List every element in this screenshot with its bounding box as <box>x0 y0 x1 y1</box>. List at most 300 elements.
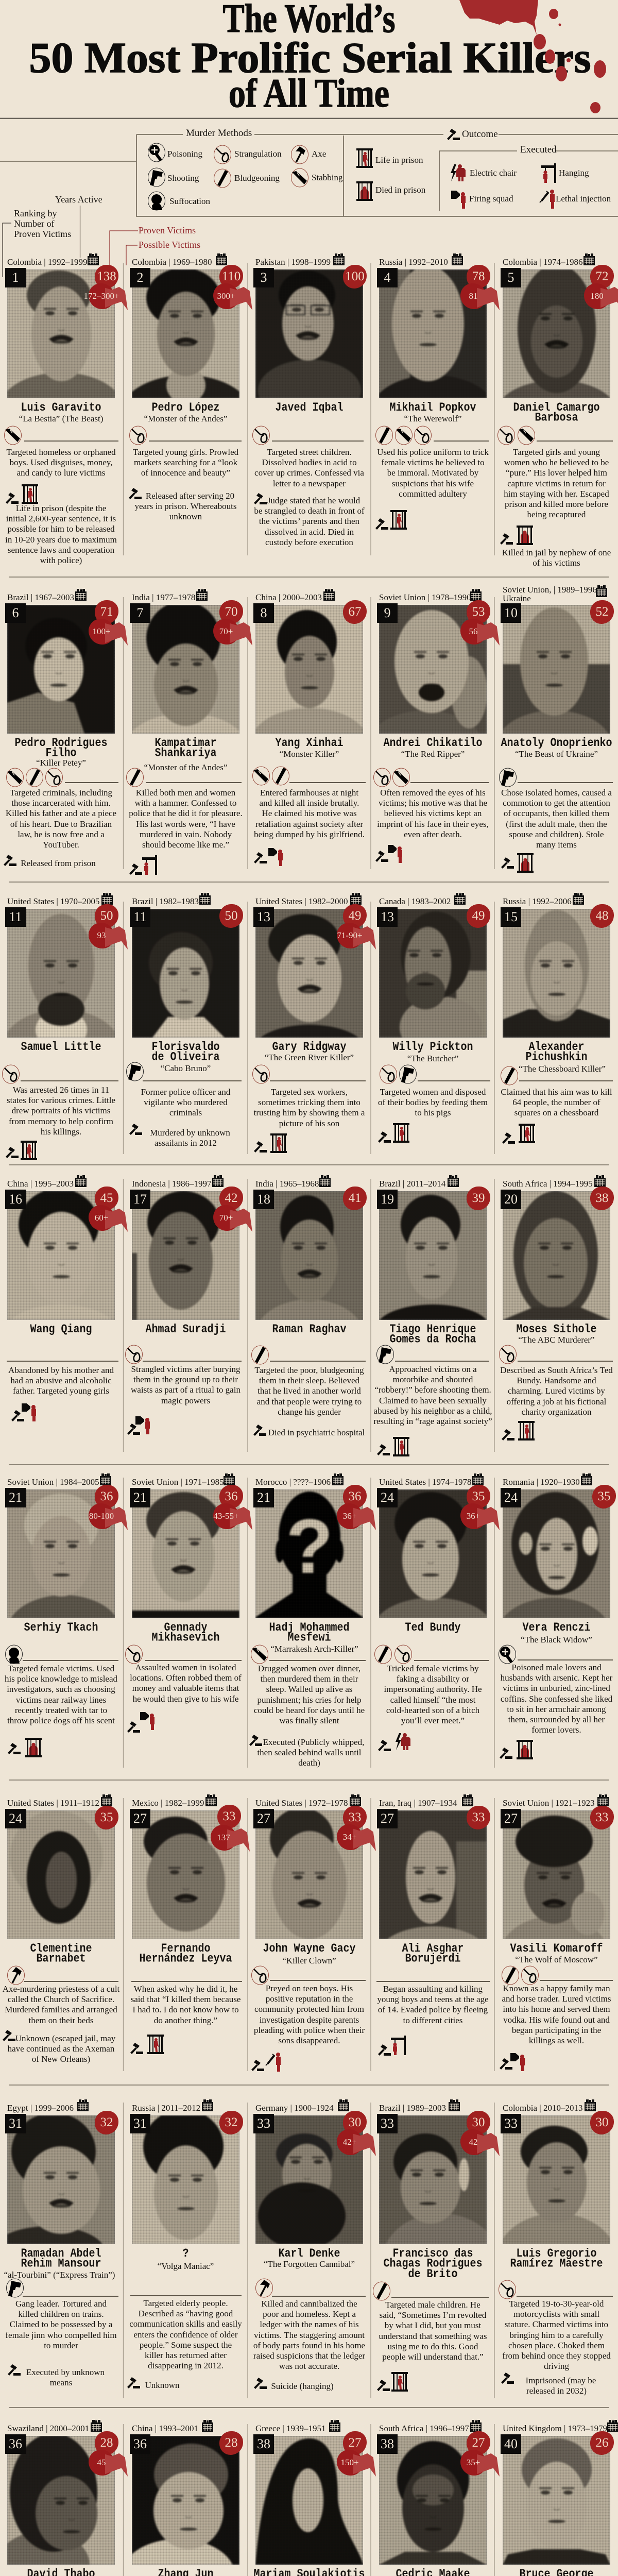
photo <box>255 2436 363 2565</box>
description <box>0 2299 123 2351</box>
outcome text: Imprisoned (may be <box>526 2376 596 2385</box>
description: former lovers. <box>531 1725 581 1735</box>
description: poor and homeless. Kept a <box>263 2309 356 2319</box>
proven victims <box>467 2431 490 2455</box>
description: of their bodies by feeding them <box>378 1097 488 1107</box>
nickname: “Monster of the Andes” <box>144 762 227 772</box>
description <box>371 1984 494 2026</box>
proven victims: 27 <box>348 2436 362 2450</box>
nickname: “The Beast of Ukraine” <box>515 749 598 759</box>
gavel <box>3 855 17 866</box>
card 26: Clementine Barnabet <box>7 1790 115 2076</box>
name: Vera Renczi <box>522 1621 591 1635</box>
outcome: life in prison <box>392 1123 410 1143</box>
rank <box>501 2114 521 2133</box>
outcome text <box>124 1128 247 1148</box>
outcome: firing squad <box>509 2052 527 2071</box>
description: Was arrested 26 times in 11 <box>13 1085 109 1095</box>
method: bludgeoning <box>501 1965 520 1985</box>
possible victims <box>89 283 114 309</box>
description <box>124 1984 247 2026</box>
description: female victims he believed to <box>381 457 485 467</box>
photo <box>7 1191 115 1320</box>
proven victims <box>467 1485 490 1509</box>
description: he would then give to his wife <box>133 1694 238 1704</box>
years active: Morocco | ????–1906 <box>255 1477 331 1487</box>
card 15: Alexander Pichushkin <box>503 888 610 1157</box>
possible victims <box>460 1503 486 1529</box>
name: Vasili Komaroff <box>510 1942 603 1956</box>
calendar icon <box>580 1473 593 1485</box>
calendar icon <box>205 1794 217 1806</box>
years active: Pakistan | 1998–1999 <box>255 257 331 267</box>
gavel <box>128 488 142 499</box>
years active: United States | 1974–1978 <box>379 1477 472 1487</box>
years active: Soviet Union, | 1989–1996 <box>503 585 597 595</box>
description: “robbery!” before shooting them. <box>374 1385 491 1395</box>
years active: United States | 1970–2005 <box>7 896 100 906</box>
method: strangulation <box>252 426 270 445</box>
description <box>124 788 247 850</box>
rank: 36 <box>9 2436 22 2451</box>
years active: Colombia | 2010–2013 <box>503 2103 582 2113</box>
description: killings as well. <box>529 2036 584 2045</box>
description: victims in unburied, zinc-lined <box>503 1683 610 1693</box>
rank: 1 <box>12 270 19 285</box>
method: strangulation <box>499 1345 517 1364</box>
years active: United States | 1982–2000 <box>255 896 348 906</box>
key label: ranking: Ranking by <box>14 208 57 218</box>
possible victims: 42+ <box>343 2137 356 2147</box>
name: Mikhail Popkov <box>389 401 476 415</box>
possible victims: 71-90+ <box>337 930 363 940</box>
outcome text: Executed by unknown <box>26 2367 105 2377</box>
name: Pedro López <box>151 401 220 415</box>
description: cold-hearted son of a bitch <box>386 1705 479 1715</box>
description <box>371 788 494 840</box>
years active: India | 1965–1968 <box>255 1179 319 1189</box>
icon: suffocation <box>148 192 165 210</box>
method: bludgeoning <box>372 2281 391 2301</box>
outcome: life in prison <box>20 1141 38 1160</box>
gavel <box>500 533 513 545</box>
method: bludgeoning <box>25 768 44 787</box>
rank <box>253 603 274 623</box>
rank: 24 <box>9 1811 22 1826</box>
years active: Soviet Union | 1971–1985 <box>132 1477 224 1487</box>
method: suffocation <box>5 1645 23 1664</box>
proven victims <box>590 2111 614 2134</box>
description: chosen place. Choked them <box>508 2341 605 2350</box>
outcome text: released in 2032) <box>526 2386 587 2396</box>
name <box>0 2249 123 2269</box>
description <box>247 788 371 840</box>
outcome text: in 10-20 years due to maximum <box>5 535 117 545</box>
outcome text: Suicide (hanging) <box>271 2381 334 2391</box>
card 13: Gary Ridgway <box>255 888 363 1157</box>
name: Ramadan Abdel <box>21 2247 101 2261</box>
calendar icon <box>87 253 99 265</box>
possible victims: 172–300+ <box>83 291 119 301</box>
outcome: life in prison <box>518 1421 535 1440</box>
description: from behind once they stopped <box>502 2351 611 2361</box>
proven victims <box>590 265 614 289</box>
description: to sit in her armchair among <box>507 1704 606 1714</box>
description: Targeted 19-to-30-year-old <box>509 2299 604 2309</box>
name <box>124 1042 248 1063</box>
gavel <box>377 1740 391 1751</box>
calendar icon <box>101 892 113 905</box>
rank: 27 <box>504 1811 518 1826</box>
card 7: Kampatimar Shankariya <box>132 584 239 876</box>
rank: 27 <box>133 1811 147 1826</box>
description: investigation despite parents <box>260 2015 359 2025</box>
title: 50 Most Prolific Serial Killers <box>29 34 591 82</box>
rank <box>501 268 521 287</box>
proven victims: 33 <box>348 1810 362 1824</box>
description: was finally silent <box>279 1716 339 1725</box>
description: imprint of his face in their eyes, <box>377 819 489 829</box>
description <box>371 1364 494 1427</box>
description: should become like me.” <box>142 840 229 850</box>
rank <box>501 1809 521 1828</box>
proven victims <box>217 1805 241 1828</box>
description <box>494 1087 618 1118</box>
proven victims: 35 <box>597 1489 611 1503</box>
description: locations. Often robbed them of <box>130 1673 242 1683</box>
description: Approached victims on a <box>389 1364 477 1374</box>
possible victims <box>584 283 610 309</box>
name: Kampatimar <box>154 737 217 750</box>
name: Mikhasevich <box>151 1632 220 1645</box>
years active: Romania | 1920–1930 <box>503 1477 580 1487</box>
rank: 8 <box>261 605 267 620</box>
description: using me to do this. Good <box>388 2342 478 2351</box>
name: Florisvaldo <box>151 1041 220 1054</box>
proven victims <box>590 1187 614 1210</box>
name: Hernández Leyva <box>139 1953 232 1966</box>
method: shooting <box>399 1064 417 1084</box>
card 17: Ahmad Suradji <box>132 1171 239 1458</box>
proven victims: 36 <box>348 1489 362 1503</box>
card 22: Gennady Mikhasevich <box>132 1469 239 1772</box>
description: Targeted criminals, including <box>10 788 112 798</box>
outcome text: Released after serving 20 <box>146 491 234 501</box>
photo <box>503 269 610 398</box>
proven victims <box>467 600 490 624</box>
outcome: firing squad <box>21 1402 38 1421</box>
photo <box>503 1489 610 1618</box>
label: strangulation: Strangulation <box>234 149 282 159</box>
description: Axe-murdering priestess of a cult <box>3 1984 119 1994</box>
icon: shooting <box>148 168 165 187</box>
description <box>494 2299 618 2371</box>
outcome text <box>247 1737 371 1769</box>
possible victims: 42 <box>469 2137 478 2147</box>
name: Ahmad Suradji <box>145 1323 226 1336</box>
rank <box>253 2434 274 2454</box>
method: axe <box>7 1965 25 1985</box>
years active: Russia | 1992–2006 <box>503 896 572 906</box>
years active: Ukraine <box>503 594 531 603</box>
method: stabbing <box>6 768 24 787</box>
rank <box>130 603 150 623</box>
description: by what I did, but you must <box>385 2320 481 2330</box>
nickname: “The Forgotten Cannibal” <box>264 2259 355 2269</box>
possible victims: 100+ <box>92 626 111 636</box>
calendar icon <box>350 892 362 905</box>
description: women who he believed to be <box>504 457 609 467</box>
description: (first the adult male, then the <box>506 819 607 829</box>
calendar icon <box>595 585 608 597</box>
description: boys. Used disguises, money, <box>9 457 113 467</box>
gavel <box>253 2378 267 2389</box>
proven victims: 32 <box>100 2115 113 2129</box>
calendar icon <box>196 588 208 601</box>
description: vigilante who murdered <box>144 1097 228 1107</box>
gavel <box>5 493 19 504</box>
proven victims: 32 <box>225 2115 238 2129</box>
description: people.” Some suspect the <box>140 2340 232 2350</box>
card 3: Javed Iqbal <box>255 249 363 562</box>
description: sleep. Walled up alive as <box>266 1684 352 1694</box>
rank <box>130 268 150 287</box>
proven victims <box>590 2431 614 2455</box>
proven victims <box>343 1806 367 1829</box>
photo <box>132 1191 239 1320</box>
proven victims: 41 <box>348 1191 362 1205</box>
proven victims: 67 <box>348 605 362 619</box>
description: them, surrounded by all her <box>508 1715 605 1724</box>
icon: strangulation <box>214 145 231 164</box>
description: charming. Lured victims by <box>508 1386 605 1396</box>
description: squares on a chessboard <box>514 1108 598 1117</box>
photo <box>7 605 115 734</box>
gavel <box>127 2377 141 2388</box>
calendar icon <box>199 892 211 905</box>
card 2: Pedro López <box>132 249 239 562</box>
description: then murdered them in their <box>261 1674 358 1684</box>
years active: Soviet Union | 1984–2005 <box>7 1477 99 1487</box>
icon: poisoning <box>148 143 165 162</box>
description: police that he did it for pleasure. <box>129 808 243 818</box>
description: female jinn who compelled him <box>5 2330 117 2340</box>
method: bludgeoning <box>251 1345 269 1365</box>
possible victims <box>89 923 114 948</box>
label: suffocation: Suffocation <box>169 196 210 206</box>
possible victims <box>460 2450 486 2476</box>
description: Targeted women and disposed <box>380 1087 486 1097</box>
description: him staying with her. Escaped <box>504 489 609 499</box>
label: bludgeoning: Bludgeoning <box>234 173 280 183</box>
description <box>124 447 247 479</box>
name: Alexander <box>528 1041 585 1054</box>
method: strangulation <box>125 1345 143 1364</box>
description: retaliation against society after <box>255 819 363 829</box>
description <box>0 788 123 850</box>
years active: Russia | 2011–2012 <box>132 2103 200 2113</box>
description: positive reputation in the <box>266 1994 353 2004</box>
nickname: “The Green River Killer” <box>265 1053 354 1062</box>
proven victims: 35 <box>100 1810 113 1824</box>
possible victims: 43-55+ <box>213 1511 239 1521</box>
nickname: “The Chessboard Killer” <box>519 1064 606 1074</box>
method: strangulation <box>252 1064 270 1084</box>
photo <box>255 2115 363 2244</box>
possible victims: 70+ <box>219 626 233 636</box>
possible victims: 80-100 <box>89 1511 114 1521</box>
method: strangulation <box>521 1965 539 1985</box>
description: capture victims in return for <box>507 479 606 488</box>
description: trusting him by showing them a <box>254 1108 365 1117</box>
photo <box>503 1191 610 1320</box>
years active: Greece | 1939–1951 <box>255 2424 326 2433</box>
description: enters the confidence of older <box>133 2330 238 2340</box>
proven victims <box>95 265 118 289</box>
outcome text <box>494 548 618 568</box>
method: strangulation <box>129 426 147 445</box>
proven victims: 33 <box>472 1810 485 1824</box>
description: called the Church of Sacrifice. <box>8 1994 114 2004</box>
years active: Brazil | 1989–2003 <box>379 2103 446 2113</box>
description: investigators, such as choosing <box>7 1684 115 1694</box>
description: Entered farmhouses at night <box>260 788 358 798</box>
description: from memory to help confirm <box>9 1116 113 1126</box>
label: poisoning: Poisoning <box>167 149 202 159</box>
method: shooting <box>376 1345 394 1364</box>
rank <box>5 1190 26 1209</box>
description: faking a disability or <box>397 1674 469 1684</box>
description: abused by his neighbor as a child, <box>374 1406 492 1416</box>
gavel <box>376 2380 390 2391</box>
proven victims <box>467 1187 490 1210</box>
description: spouse and children). Stole <box>509 829 604 839</box>
description: Murdered families and arranged <box>5 2005 117 2014</box>
description <box>247 2299 371 2371</box>
calendar icon <box>451 253 464 265</box>
name: de Oliveira <box>151 1051 220 1064</box>
name: Borujerdi <box>405 1953 461 1966</box>
key label: possible victims: Possible Victims <box>139 240 200 250</box>
name: Samuel Little <box>21 1041 101 1054</box>
proven victims: 26 <box>595 2436 609 2450</box>
rank <box>253 268 274 287</box>
name: Luis Gregorio <box>516 2247 597 2261</box>
proven victims: 138 <box>97 269 116 283</box>
possible victims <box>460 283 486 309</box>
card 9: Andrei Chikatilo <box>379 584 487 876</box>
description: being dumped by his girlfriend. <box>254 829 365 839</box>
years active: Colombia | 1969–1980 <box>132 257 212 267</box>
name <box>247 1623 371 1643</box>
method: strangulation <box>497 426 516 445</box>
description <box>0 1664 123 1726</box>
description: magic powers <box>161 1396 210 1405</box>
description: waists as part of a ritual to gain <box>131 1385 241 1395</box>
description: said, “Sometimes I’m revolted <box>380 2310 486 2320</box>
photo <box>132 605 239 734</box>
name: Filho <box>45 747 76 760</box>
outcome text: years in prison. Whereabouts <box>135 501 236 511</box>
rank: 16 <box>9 1192 22 1207</box>
possible victims <box>213 1503 239 1529</box>
rank <box>130 1809 150 1828</box>
description: commotion to get the attention <box>503 798 610 808</box>
title <box>29 0 591 115</box>
gavel <box>253 1141 267 1153</box>
calendar icon <box>99 1473 112 1485</box>
name <box>124 738 248 759</box>
gavel <box>376 1444 390 1455</box>
description: offering a job at his fictional <box>507 1397 606 1406</box>
rank: 9 <box>384 605 390 620</box>
photo <box>132 909 239 1038</box>
nickname: “Monster Killer” <box>280 749 339 759</box>
description: driving <box>544 2361 569 2371</box>
years active: United States | 1911–1912 <box>7 1798 99 1808</box>
nickname: “al-Tourbini” (“Express Train”) <box>4 2270 115 2280</box>
method: bludgeoning <box>375 426 393 445</box>
calendar icon <box>454 892 466 905</box>
proven victims <box>219 1485 243 1509</box>
possible victims: 35+ <box>467 2458 480 2467</box>
method: bludgeoning <box>374 1645 392 1664</box>
description: Strangled victims after burying <box>131 1364 240 1374</box>
rank <box>377 603 398 623</box>
description: committed adultery <box>399 489 467 499</box>
gavel <box>499 1748 513 1759</box>
rank: 18 <box>257 1192 270 1207</box>
name: Francisco das <box>392 2247 473 2261</box>
proven victims <box>219 1187 243 1210</box>
rank: 20 <box>504 1192 518 1207</box>
description: punishment; his cries for help <box>257 1695 362 1705</box>
heading: murder methods: Murder Methods <box>186 128 252 139</box>
proven victims <box>343 2431 367 2455</box>
description: killed children on trains. <box>18 2309 104 2319</box>
description <box>371 1087 494 1118</box>
rank: 24 <box>381 1490 394 1505</box>
outcome text: unknown <box>169 512 202 521</box>
proven victims <box>95 1187 118 1210</box>
possible victims <box>89 2450 114 2476</box>
outcome text: custody before execution <box>265 537 353 547</box>
rank <box>5 1488 26 1507</box>
outcome: firing squad <box>134 1415 152 1434</box>
gavel <box>502 1132 516 1144</box>
proven victims: 45 <box>100 1191 113 1205</box>
description: his killings. <box>41 1127 81 1137</box>
description: communication skills and easily <box>129 2319 242 2329</box>
proven victims <box>95 600 118 624</box>
icon: stabbing <box>291 168 308 188</box>
outcome text: Killed in jail by nephew of one <box>502 548 611 557</box>
rank: 6 <box>12 605 19 620</box>
method: strangulation <box>414 426 432 445</box>
description: to his pigs <box>415 1108 451 1117</box>
calendar icon <box>75 1175 87 1187</box>
years active: United Kingdom | 1973–1979 <box>503 2424 607 2433</box>
description: had an abusive and alcoholic <box>10 1376 112 1385</box>
name: Chagas Rodrigues <box>383 2258 483 2271</box>
possible victims <box>213 1205 239 1231</box>
calendar icon <box>201 2099 214 2111</box>
description: Dissolved bodies in acid to <box>262 457 357 467</box>
description: throw police dogs off his scent <box>7 1716 115 1725</box>
label: firing squad: Firing squad <box>469 194 513 204</box>
description: Described as “having good <box>139 2309 233 2318</box>
calendar icon <box>77 2099 89 2111</box>
